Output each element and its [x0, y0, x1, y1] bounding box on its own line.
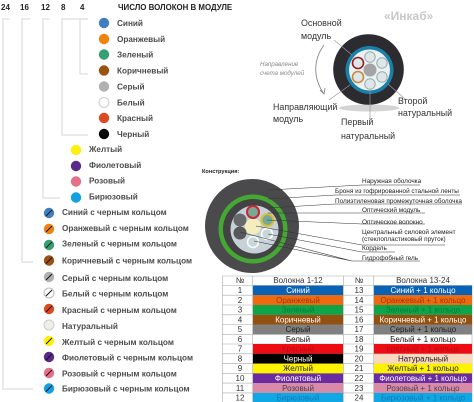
table fiber names 13-24: Серый + 1 кольцо — [390, 325, 457, 334]
table fiber names 1-12: Серый — [286, 325, 310, 334]
header: fiber counts: 4 — [80, 3, 85, 12]
legend: fibers 1-8: Синий — [117, 19, 143, 28]
table fiber names 13-24: Зеленый + 1 кольцо — [386, 306, 461, 314]
arrow: counting direction — [316, 45, 325, 94]
table fiber names 1-12: Фиолетовый — [275, 374, 321, 383]
table number columns: 11 — [236, 384, 245, 393]
construction labels — [335, 177, 462, 262]
table fiber names 13-24: Синий + 1 кольцо — [390, 286, 456, 295]
table fiber names 13-24: Красный + 1 кольцо — [386, 344, 460, 354]
table number columns: 17 — [355, 325, 364, 334]
construction heading: Конструкция: — [202, 169, 239, 175]
table fiber names 1-12: Красный — [282, 344, 314, 354]
table fiber names 1-12: Оранжевый — [276, 296, 320, 305]
table number columns: 6 — [238, 335, 243, 344]
table header row: № — [355, 276, 364, 285]
table number columns: 4 — [238, 316, 243, 324]
construction labels: Кордель — [362, 245, 387, 252]
table number columns: 2 — [238, 296, 243, 305]
table number columns: 20 — [355, 354, 364, 364]
table number columns: 3 — [238, 306, 243, 314]
cable diagram: module layout — [333, 34, 404, 112]
counting direction note: счета модулей — [260, 70, 305, 77]
color table — [222, 276, 472, 402]
table color cells — [253, 286, 472, 402]
cable diagram labels: Основной — [301, 18, 342, 28]
cable diagram labels: натуральный — [398, 108, 452, 118]
cable diagram labels: Направляющий — [273, 102, 337, 112]
legend: fibers 1-8: Зеленый — [117, 50, 153, 60]
header: fiber counts: 12 — [41, 3, 50, 12]
legend: fibers 13-24 with black ring: Зеленый с черным кольцом — [62, 240, 177, 248]
brand label: «Инкаб» — [384, 9, 434, 23]
table number columns: 10 — [236, 374, 245, 383]
cable diagram labels: Второй — [398, 96, 427, 106]
table fiber names 1-12: Желтый — [283, 364, 313, 373]
table number columns: 18 — [355, 335, 364, 344]
legend: fibers 1-8: Белый — [117, 98, 145, 108]
legend: fibers 13-24 with black ring: Натуральный — [62, 322, 118, 331]
legend: fibers 1-8: Красный — [117, 114, 153, 123]
legend: fibers 13-24 with black ring: Красный с черным кольцом — [62, 306, 177, 315]
header: fiber counts — [1, 3, 85, 12]
table fiber names 1-12: Черный — [284, 354, 312, 364]
table number columns: 9 — [238, 364, 243, 373]
table fiber names 1-12: Синий — [286, 286, 310, 295]
table header row — [236, 276, 450, 285]
table fiber names 13-24: Коричневый + 1 кольцо — [380, 316, 467, 324]
legend: fibers 9-12: Бирюзовый — [89, 192, 138, 202]
header: fiber counts: 24 — [1, 3, 10, 12]
construction labels: Оптический модуль — [362, 206, 421, 214]
legend: fibers 13-24 with black ring: Синий с черным кольцом — [62, 208, 167, 217]
table fiber names 13-24: Фиолетовый + 1 кольцо — [379, 374, 467, 383]
table number columns: 21 — [355, 364, 364, 373]
table number columns: 15 — [355, 306, 364, 314]
legend: fibers 13-24 with black ring: Бирюзовый с черным кольцом — [62, 384, 190, 394]
table fiber names 1-12: Коричневый — [275, 316, 321, 324]
table number columns — [236, 286, 364, 402]
table number columns: 16 — [355, 316, 364, 324]
legend: fibers 13-24 with black ring — [44, 208, 193, 394]
construction labels: Гидрофобный гель — [362, 254, 419, 262]
construction labels: Наружная оболочка — [362, 177, 422, 185]
table fiber names 13-24 — [379, 286, 467, 402]
table number columns: 7 — [238, 344, 243, 354]
construction labels: Оптическое волокно — [362, 219, 423, 226]
cable diagram labels: натуральный — [341, 131, 395, 141]
table header row: Волокна 13-24 — [396, 276, 450, 285]
table number columns: 1 — [238, 286, 243, 295]
construction labels: Центральный силовой элемент — [362, 228, 456, 236]
legend: fibers 13-24 with black ring: Белый с черным кольцом — [62, 290, 168, 298]
legend: fibers 9-12: Желтый — [88, 145, 122, 154]
header: fiber counts: 16 — [20, 3, 29, 12]
table fiber names 13-24: Желтый + 1 кольцо — [387, 364, 459, 373]
legend: fibers 13-24 with black ring: Серый с черным кольцом — [62, 274, 168, 283]
legend: fibers 1-8 — [99, 18, 168, 139]
table number columns: 14 — [355, 296, 364, 305]
table number columns: 8 — [238, 354, 243, 364]
table fiber names 13-24: Оранжевый + 1 кольцо — [380, 296, 466, 305]
counting direction note — [260, 61, 305, 77]
table fiber names 13-24: Натуральный — [398, 354, 448, 364]
cable cross section — [205, 179, 299, 273]
table number columns: 5 — [238, 325, 243, 334]
table number columns: 22 — [355, 374, 364, 383]
construction labels: Броня из гофрированной стальной ленты — [335, 187, 459, 195]
brackets: fiber count ranges — [3, 19, 88, 389]
legend: fibers 1-8: Оранжевый — [117, 35, 165, 44]
counting direction note: Направление — [260, 61, 299, 68]
cable diagram labels — [273, 18, 452, 141]
table fiber names 1-12: Зеленый — [282, 306, 314, 314]
construction labels: (стеклопластиковый пруток) — [362, 235, 446, 243]
legend: fibers 13-24 with black ring: Розовый с черным кольцом — [62, 370, 177, 378]
table number columns: 19 — [355, 344, 364, 354]
table number columns: 13 — [355, 286, 364, 295]
cable diagram labels: модуль — [273, 114, 303, 124]
header: fiber counts: 8 — [61, 3, 66, 12]
legend: fibers 9-12 — [71, 145, 141, 203]
legend: fibers 13-24 with black ring: Фиолетовый с черным кольцом — [62, 354, 193, 362]
legend: fibers 13-24 with black ring: Оранжевый с черным кольцом — [62, 224, 189, 233]
legend: fibers 9-12: Фиолетовый — [89, 161, 141, 170]
legend: fibers 13-24 with black ring: Коричневый с черным кольцом — [62, 256, 192, 266]
leader lines — [329, 40, 405, 122]
construction labels: Полиэтиленовая промежуточная оболочка — [335, 197, 462, 205]
table header row: Волокна 1-12 — [273, 276, 323, 285]
table fiber names 1-12 — [275, 286, 321, 402]
title: ЧИСЛО ВОЛОКОН В МОДУЛЕ — [118, 3, 232, 12]
cable diagram labels: модуль — [301, 31, 331, 41]
table header row: № — [236, 276, 245, 285]
legend: fibers 1-8: Коричневый — [117, 66, 168, 76]
table number columns: 23 — [355, 384, 364, 393]
legend: fibers 9-12: Розовый — [89, 176, 125, 186]
table grid — [222, 276, 472, 402]
table fiber names 13-24: Белый + 1 кольцо — [390, 335, 456, 344]
legend: fibers 1-8: Серый — [117, 82, 144, 92]
legend: fibers 1-8: Черный — [117, 130, 149, 139]
construction leader lines — [240, 185, 462, 261]
cable diagram labels: Первый — [341, 117, 373, 127]
legend: fibers 13-24 with black ring: Желтый с черным кольцом — [61, 338, 174, 347]
table fiber names 1-12: Белый — [286, 335, 310, 344]
table fiber names 1-12: Розовый — [282, 384, 314, 393]
table fiber names 13-24: Розовый + 1 кольцо — [386, 384, 460, 393]
